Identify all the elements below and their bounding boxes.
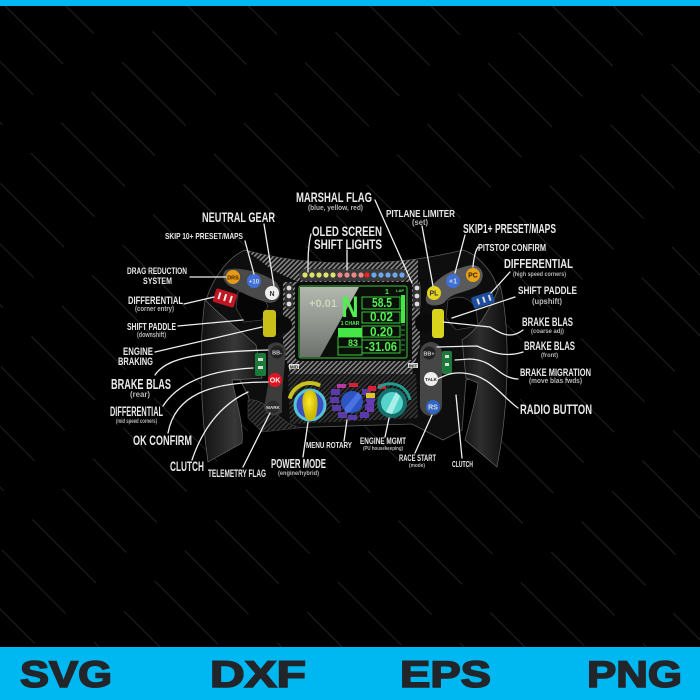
switch: green left [255, 353, 266, 376]
label: brake bias coarse: (coarse adj) [531, 328, 564, 335]
left rotary [263, 310, 292, 337]
label: drag reduction system [127, 266, 187, 287]
top right button pill [426, 265, 483, 305]
label: brake bias front: (front) [541, 352, 558, 359]
label: engine mgmt: (PU housekeeping) [363, 446, 403, 452]
bottom banner [0, 647, 700, 700]
button: PL: PL [430, 290, 439, 298]
marshal lights left [285, 283, 293, 309]
label: race start: RACE START [399, 453, 436, 463]
label: marshal flag [296, 189, 372, 212]
button: N [265, 286, 279, 300]
screen: LAP [396, 288, 404, 293]
screen: 1 CHAR [341, 321, 360, 327]
screen tags: INIT [409, 364, 418, 368]
label: pitstop confirm: PITSTOP CONFIRM [478, 243, 546, 254]
button: TALK: TALK [425, 377, 438, 382]
button: +10 [247, 274, 261, 288]
lower panel [288, 374, 418, 424]
button: MARK: MARK [266, 405, 280, 410]
button: DRS [226, 270, 240, 284]
label: power mode: POWER MODE [271, 457, 326, 471]
label: marshal flag: MARSHAL FLAG [296, 189, 372, 205]
steering wheel [201, 250, 507, 467]
button: TALK [424, 372, 438, 386]
screen [295, 282, 410, 361]
label: brake migration: BRAKE MIGRATION [520, 367, 591, 379]
label: oled screen shift lights [312, 224, 382, 252]
label: oled screen shift lights: SHIFT LIGHTS [314, 237, 382, 252]
label: race start [399, 453, 436, 469]
label: differential high speed: DIFFERENTIAL [504, 256, 573, 271]
label: telemetry flag: TELEMETRY FLAG [208, 468, 266, 480]
label: brake bias rear: (rear) [130, 389, 150, 399]
screen tags [289, 363, 418, 370]
label: power mode: (engine/hybrid) [278, 470, 319, 477]
screen tags: MID [290, 364, 299, 370]
screen: +0.01 [309, 298, 337, 310]
left lower flap [248, 400, 300, 432]
label: brake migration [520, 367, 591, 385]
label: shift paddle upshift: (upshift) [532, 296, 562, 306]
label: differential corner entry: (corner entry) [135, 304, 174, 313]
carbon below screen [283, 282, 420, 374]
label: pitlane limiter: PITLANE LIMITER [386, 208, 455, 220]
label: differential high speed: (high speed corners) [513, 271, 566, 278]
screen: 0.02 [370, 309, 393, 324]
screen: -31.06 [365, 339, 397, 354]
label: drag reduction system: DRAG REDUCTION [127, 266, 187, 277]
leader lines [155, 200, 523, 467]
screen: N [342, 291, 358, 324]
button: N: N [269, 291, 275, 298]
button: MARK [266, 400, 280, 414]
button: BB- [270, 346, 284, 358]
shift lights [299, 269, 407, 281]
left paddle recess [236, 292, 268, 322]
button: RS: RS [428, 404, 438, 412]
screen: 58.5 [372, 295, 392, 310]
label: drag reduction system: SYSTEM [143, 276, 172, 287]
right button pill [420, 342, 442, 416]
format: SVG: SVG [20, 654, 112, 695]
screen: 1 [385, 289, 389, 296]
label: clutch left: CLUTCH [170, 458, 204, 474]
button: PL [427, 286, 441, 300]
button: DRS: DRS [227, 276, 239, 282]
left button pill [264, 343, 286, 415]
label: menu rotary: MENU ROTARY [306, 440, 352, 450]
button: +1 [446, 274, 460, 288]
label: skip1+: SKIP1+ PRESET/MAPS [463, 222, 556, 236]
top bar [0, 0, 700, 6]
switch: green right [442, 351, 452, 374]
label: engine mgmt: ENGINE MGMT [360, 436, 406, 447]
label: skip 10+: SKIP 10+ PRESET/MAPS [165, 231, 243, 241]
label: shift paddle upshift [518, 285, 577, 306]
label: brake bias coarse: BRAKE BLAS [522, 317, 573, 329]
screen: 0.20 [370, 324, 393, 339]
label: oled screen shift lights: OLED SCREEN [312, 224, 382, 239]
right paddle recess [446, 297, 478, 330]
label: shift paddle downshift: (downshift) [137, 330, 166, 339]
button: BB+ [422, 346, 436, 360]
label: engine mgmt [360, 436, 406, 452]
top carbon strip [245, 250, 418, 360]
screen: 83 [348, 338, 358, 348]
right grip [462, 285, 507, 467]
label: race start: (mode) [409, 463, 425, 469]
label: differential mid speed [110, 404, 163, 425]
label: shift paddle upshift: SHIFT PADDLE [518, 285, 577, 297]
label: power mode [271, 457, 326, 477]
label: differential corner entry: DIFFERENTIAL [128, 295, 183, 307]
left top button pill [223, 269, 280, 303]
label: engine braking [118, 346, 153, 368]
label: brake bias front [524, 341, 575, 359]
label: clutch right: CLUTCH [452, 459, 473, 469]
dial: power mode [284, 378, 336, 430]
label: differential high speed [504, 256, 573, 278]
left grip [201, 300, 262, 462]
format: PNG: PNG [587, 654, 682, 695]
dial: menu rotary [330, 383, 375, 420]
button: PC: PC [468, 272, 478, 280]
label: differential mid speed: DIFFERENTIAL [110, 404, 163, 419]
label: differential mid speed: (mid speed corners) [116, 418, 157, 425]
button: +1: +1 [449, 278, 457, 286]
button: BB-: BB- [272, 350, 282, 356]
button: +10: +10 [249, 280, 260, 286]
label: marshal flag: (blue, yellow, red) [308, 203, 363, 212]
button: OK: OK [270, 378, 280, 384]
format: EPS: EPS [400, 654, 491, 695]
label: ok confirm: OK CONFIRM [133, 432, 192, 448]
button: OK [268, 373, 282, 387]
label: pitlane limiter [386, 208, 455, 227]
label: radio button: RADIO BUTTON [520, 401, 592, 417]
format: DXF: DXF [210, 654, 306, 695]
switch: blue differential [471, 291, 495, 309]
switch: red differential [212, 288, 238, 308]
dial: engine mgmt [366, 384, 410, 418]
label: pitlane limiter: (set) [412, 218, 428, 227]
label: shift paddle downshift [127, 321, 176, 339]
marshal lights right [413, 283, 421, 309]
right rotary [415, 309, 444, 338]
label: shift paddle downshift: SHIFT PADDLE [127, 321, 176, 333]
label: brake migration: (move blas fwds) [529, 378, 582, 385]
label: neutral gear: NEUTRAL GEAR [202, 209, 275, 225]
button: RS [426, 400, 440, 414]
label: engine braking: BRAKING [118, 356, 153, 368]
label: differential corner entry [128, 295, 183, 313]
label: brake bias rear [111, 377, 171, 399]
label: engine braking: ENGINE [123, 346, 153, 358]
label: brake bias front: BRAKE BLAS [524, 341, 575, 353]
label: brake bias coarse [522, 317, 573, 335]
wheel body [203, 250, 506, 440]
button: BB+: BB+ [423, 352, 435, 358]
label: brake bias rear: BRAKE BLAS [111, 377, 171, 393]
button: PC [466, 268, 480, 282]
